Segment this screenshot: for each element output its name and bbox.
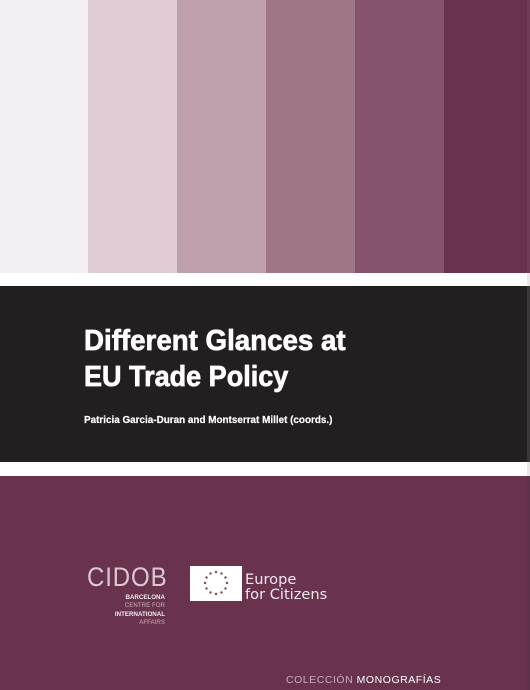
title line 1: Different Glances at — [84, 325, 346, 357]
title line 2: EU Trade Policy — [84, 361, 288, 393]
logo: CIDOB — [87, 562, 168, 626]
logo: EU flag — [190, 566, 242, 601]
CIDOB tagline: INTERNATIONAL — [115, 611, 165, 618]
logo text: Europe for Citizens: for Citizens — [245, 586, 327, 602]
CIDOB tagline: BARCELONA — [125, 594, 165, 601]
CIDOB tagline: AFFAIRS — [139, 619, 165, 626]
CIDOB tagline — [115, 594, 165, 626]
panel: colour swatch stripes — [0, 0, 527, 273]
logo text: Europe for Citizens — [245, 571, 327, 602]
title — [84, 325, 346, 393]
right edge strip — [527, 0, 530, 690]
swatch 1 — [0, 0, 88, 273]
swatch 4 — [266, 0, 355, 273]
authors: Patricia Garcia-Duran and Montserrat Millet (coords.) — [84, 414, 332, 426]
collection label: COLECCIÓN MONOGRAFÍAS — [286, 674, 441, 686]
CIDOB tagline: CENTRE FOR — [125, 602, 165, 609]
panel: plum footer — [0, 476, 527, 690]
logo text: Europe for Citizens: Europe — [245, 571, 296, 588]
swatch 5 — [355, 0, 444, 273]
swatch 2 — [88, 0, 177, 273]
swatch 6 — [444, 0, 527, 273]
panel: black title band — [0, 286, 527, 462]
swatch 3 — [177, 0, 266, 273]
CIDOB wordmark: CIDOB — [87, 562, 168, 592]
